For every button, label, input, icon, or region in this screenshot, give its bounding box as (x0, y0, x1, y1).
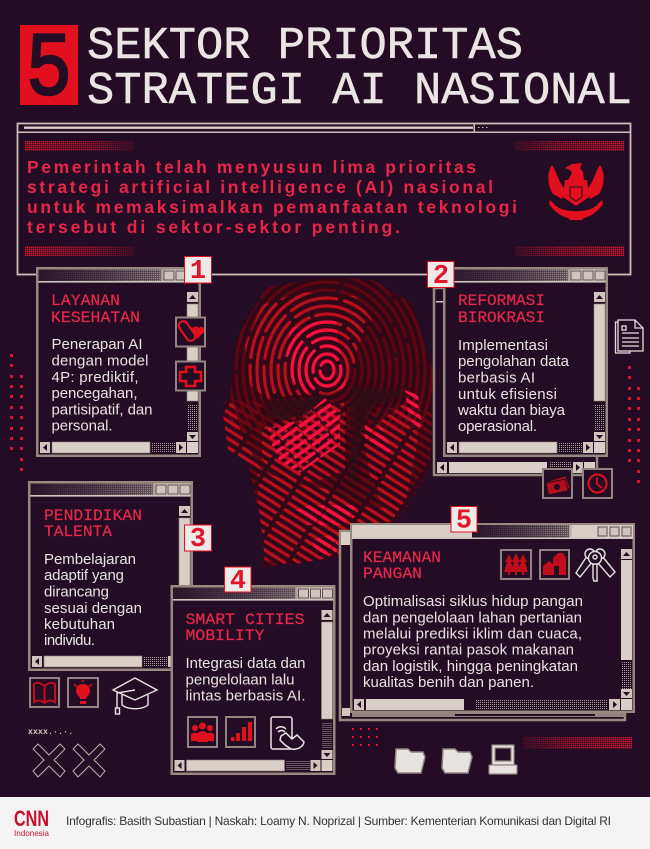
scrollbars (354, 549, 632, 710)
badge 2 (428, 262, 454, 292)
intro text (27, 157, 517, 237)
body text (363, 593, 583, 691)
heading: SMART CITIES (186, 611, 304, 629)
icon: document (616, 320, 643, 353)
dither strips (25, 141, 624, 256)
icon: two crosses (33, 744, 105, 777)
panel: window 3 pendidikan talenta (29, 482, 192, 714)
panel: window 4 smart cities mobility (172, 586, 334, 774)
fingerprint portrait (222, 250, 433, 567)
eye and nose shadows (265, 385, 415, 485)
credits: Infografis: Basith Subastian | Naskah: Loamy N. Noprizal | Sumber: Kementerian Komunikasi dan Digital RI (66, 814, 611, 828)
body text (52, 336, 152, 434)
badge 1: 1 (190, 257, 206, 287)
body text: dirancang (44, 584, 109, 600)
body text: Optimalisasi siklus hidup pangan (363, 593, 583, 610)
body text: dan logistik, hingga peningkatan (363, 658, 578, 675)
title text (87, 21, 632, 117)
icon: clock (583, 469, 612, 498)
badge 5 (451, 506, 477, 536)
heading: MOBILITY (186, 627, 265, 645)
body text: pengelolaan lalu (186, 672, 294, 688)
body text: Implementasi (458, 337, 548, 354)
red dither strip (523, 737, 632, 749)
heading (51, 292, 140, 327)
icon: computer (489, 745, 517, 774)
body text (457, 337, 570, 435)
badge 3 (184, 525, 212, 555)
body text: adaptif yang (44, 567, 124, 584)
icon: folder (395, 749, 425, 773)
panel: intro window (17, 124, 631, 274)
badge 4 (224, 567, 251, 597)
icon: pills and heart (176, 318, 205, 346)
heading: KEAMANAN (363, 549, 441, 567)
heading: KESEHATAN (51, 309, 140, 327)
heading: TALENTA (44, 523, 112, 541)
body text: personal. (52, 418, 112, 434)
icon: garuda emblem (548, 163, 604, 220)
number five badge: 5 (26, 20, 72, 122)
intro text: strategi artificial intelligence (AI) nasional (27, 177, 493, 197)
footer (0, 797, 650, 849)
badge 3: 3 (190, 525, 206, 555)
icon: book (30, 678, 59, 707)
heading: LAYANAN (51, 292, 120, 310)
icon: folder (442, 749, 472, 773)
body text: pencegahan, (52, 385, 138, 402)
body text: lintas berbasis AI. (186, 688, 306, 704)
body text: 4P: prediktif, (52, 369, 138, 386)
badge 4: 4 (230, 567, 246, 597)
body text: Integrasi data dan (186, 655, 306, 672)
heading (458, 292, 545, 327)
badge 5: 5 (456, 506, 472, 536)
body text: operasional. (458, 418, 537, 435)
heading: BIROKRASI (458, 309, 545, 327)
body text: kebutuhan (44, 616, 115, 633)
body text (186, 655, 306, 704)
icon: trees (501, 550, 531, 579)
intro text: untuk memaksimalkan pemanfaatan teknologi (27, 197, 517, 217)
heading (363, 549, 441, 583)
icon: light bulb (68, 678, 98, 707)
red dot columns right (628, 366, 640, 483)
icon: barn (540, 550, 569, 579)
title text: STRATEGI AI NASIONAL (87, 66, 632, 117)
body text: Penerapan AI (52, 336, 142, 353)
body text: berbasis AI (458, 370, 535, 386)
badge 2: 2 (433, 262, 449, 292)
panel: window 1 layanan kesehatan (37, 268, 205, 456)
badge 1 (184, 256, 212, 287)
icon: medical cross (176, 362, 205, 390)
body text: proyeksi rantai pasok makanan (363, 642, 574, 658)
intro text: Pemerintah telah menyusun lima prioritas (27, 157, 476, 177)
red dot columns left (10, 354, 23, 471)
icon: people (188, 717, 217, 747)
body text: dengan model (52, 352, 148, 370)
title bar (352, 525, 633, 539)
body text: Pembelajaran (44, 551, 136, 568)
body text: partisipatif, dan (52, 402, 152, 418)
heading: PENDIDIKAN (44, 507, 142, 525)
body text (44, 551, 142, 649)
CNN Indonesia logo: Indonesia (14, 828, 49, 838)
icon: keys (576, 549, 615, 581)
heading (186, 611, 304, 645)
body text: untuk efisiensi (458, 386, 557, 403)
heading (44, 507, 142, 541)
body text: waktu dan biaya (457, 402, 566, 419)
heading: REFORMASI (458, 292, 545, 310)
body text: kualitas benih dan panen. (363, 674, 534, 691)
pixel marks: xxxx.·.·. (28, 728, 73, 737)
icon: signal bars (226, 717, 255, 747)
CNN Indonesia logo: CNN (14, 806, 49, 831)
panel: window 5 keamanan pangan (340, 524, 634, 720)
body text: dan pengelolaan lahan pertanian (363, 610, 582, 626)
body text: individu. (44, 632, 95, 649)
back window (340, 531, 625, 720)
CNN Indonesia logo (14, 806, 49, 838)
red dot block (351, 723, 383, 748)
body text: sesuai dengan (44, 600, 142, 617)
intro text: tersebut di sektor-sektor penting. (27, 217, 400, 237)
title text: SEKTOR PRIORITAS (87, 21, 523, 72)
body text: pengolahan data (458, 353, 570, 370)
title block (20, 20, 632, 122)
back window (434, 288, 597, 475)
body text: melalui prediksi iklim dan cuaca, (363, 626, 582, 642)
icon: phone with hand (271, 717, 304, 749)
heading: PANGAN (363, 565, 422, 583)
icon: graduation cap (113, 678, 157, 714)
icon: money (543, 469, 572, 498)
panel: window 2 reformasi birokrasi (434, 268, 643, 498)
